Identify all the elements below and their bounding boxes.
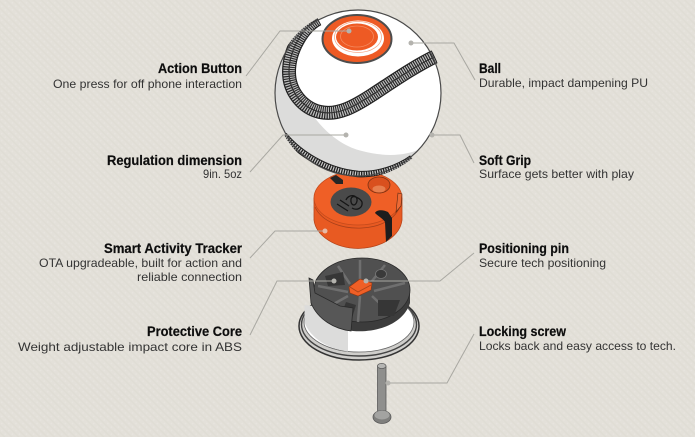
label: protective core: Weight adjustable impact core in ABS (18, 340, 242, 354)
label: ball: Durable, impact dampening PU (479, 76, 648, 90)
edge notch (396, 193, 402, 212)
label: ball (479, 61, 648, 90)
label: soft grip (479, 153, 634, 181)
ball outline (275, 10, 441, 176)
leader: locking screw (386, 334, 474, 386)
locking screw (373, 363, 391, 424)
positioning pin (349, 279, 372, 296)
label: action button: One press for off phone interaction (53, 77, 242, 91)
label: soft grip: Surface gets better with play (479, 167, 634, 181)
label: positioning pin (479, 241, 606, 270)
leader: soft grip (430, 132, 474, 163)
raised wall (309, 278, 353, 331)
label: action button (53, 61, 242, 91)
leader: protective core (250, 278, 336, 335)
battery well (368, 177, 390, 193)
side slot (375, 210, 392, 242)
label: ball: Ball (479, 61, 501, 76)
lower seam (284, 135, 412, 174)
leader: ball (408, 40, 475, 80)
leader: action button (246, 28, 352, 76)
label: protective core (18, 324, 242, 354)
sensor disc (330, 188, 372, 216)
label: smart activity tracker: Smart Activity Tracker (104, 241, 243, 256)
label: action button: Action Button (158, 61, 242, 76)
top slot (330, 175, 343, 184)
ball (275, 10, 445, 176)
core body (314, 258, 410, 331)
label: smart activity tracker (39, 241, 243, 284)
label: smart activity tracker: reliable connection (137, 270, 242, 284)
label: positioning pin: Positioning pin (479, 241, 569, 256)
label: regulation dimension: 9in. 5oz (203, 167, 242, 181)
leader: positioning pin (364, 253, 474, 284)
bowl shadow (304, 305, 348, 352)
label: regulation dimension: Regulation dimension (107, 153, 242, 168)
upper seam (289, 19, 436, 113)
smart activity tracker (314, 171, 402, 248)
label: positioning pin: Secure tech positioning (479, 256, 606, 270)
label: soft grip: Soft Grip (479, 153, 531, 168)
label: locking screw (479, 324, 676, 353)
outer rim (299, 292, 419, 360)
leader: regulation dimension (250, 132, 348, 172)
label: regulation dimension (107, 153, 242, 181)
protective core (299, 258, 419, 360)
label: locking screw: Locking screw (479, 324, 566, 339)
label: locking screw: Locks back and easy access to tech. (479, 339, 676, 353)
leader: smart activity tracker (250, 228, 328, 258)
label: smart activity tracker: OTA upgradeable, built for action and (39, 256, 242, 270)
label: protective core: Protective Core (147, 324, 242, 339)
action button (322, 15, 392, 63)
